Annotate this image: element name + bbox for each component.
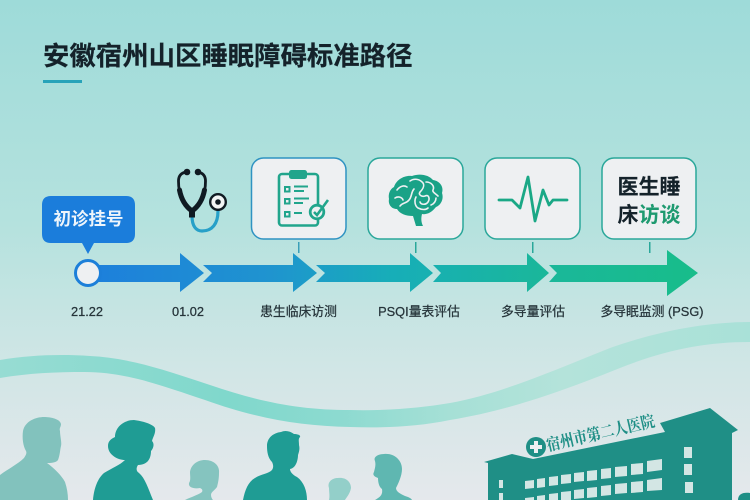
- callout: first visit: [42, 196, 135, 254]
- label: PSG: 多导眠监测 (PSG): [600, 304, 704, 319]
- silhouette: person 4: [243, 431, 307, 500]
- silhouette: person 3: [185, 460, 219, 500]
- icon: clipboard checklist: [279, 170, 328, 226]
- connector 2: [415, 242, 416, 253]
- arrow segment 3: [316, 253, 433, 292]
- connector 1: [298, 242, 300, 253]
- hospital sign: [526, 411, 657, 457]
- panel: polysomnography assessment card: [485, 158, 580, 239]
- label: PSQI: PSQI量表评估: [378, 304, 460, 319]
- title: 安徽宿州山区睡眠障碍标准路径: [43, 41, 412, 71]
- silhouette: person 1: [0, 417, 68, 500]
- timeline labels: [71, 304, 704, 319]
- arrow segment 5: [549, 250, 698, 296]
- panel: doctor sleep interview card: 医生睡: [618, 176, 680, 199]
- connector 4: [649, 242, 650, 253]
- callout: first visit: 初诊挂号: [54, 209, 124, 229]
- start node circle: [76, 260, 100, 286]
- sign logo: [526, 437, 546, 457]
- timeline arrows: [88, 250, 698, 296]
- sign text: 宿州市第二人医院: [545, 411, 657, 455]
- arrow segment 4: [433, 253, 549, 292]
- panel: clinical visit card: [252, 158, 346, 239]
- icon: brain: [389, 175, 443, 226]
- arrow segment 2: [203, 253, 317, 292]
- icon: stethoscope: [178, 169, 226, 231]
- small tree: [738, 493, 750, 500]
- icon: pulse line: [499, 177, 567, 221]
- title underline: [43, 80, 82, 83]
- panel: doctor sleep interview card: [602, 158, 696, 239]
- decorative wave band: [0, 322, 750, 427]
- connector 3: [532, 242, 534, 253]
- label: patient visit: 患生临床访测: [260, 304, 337, 319]
- label: 01.02: 01.02: [172, 304, 204, 319]
- silhouette: person 2: [93, 420, 155, 500]
- panel: doctor sleep interview card: 床访谈: [618, 203, 680, 227]
- panel: PSQI card: [368, 158, 463, 239]
- silhouette: person 5: [329, 478, 351, 500]
- windows: [499, 447, 693, 500]
- silhouette: person 6: [373, 454, 412, 500]
- building: hospital: [484, 408, 738, 500]
- label: multi-lead assessment: 多导量评估: [501, 304, 565, 319]
- label: 21.22: 21.22: [71, 304, 103, 319]
- arrow segment 1: [88, 253, 204, 292]
